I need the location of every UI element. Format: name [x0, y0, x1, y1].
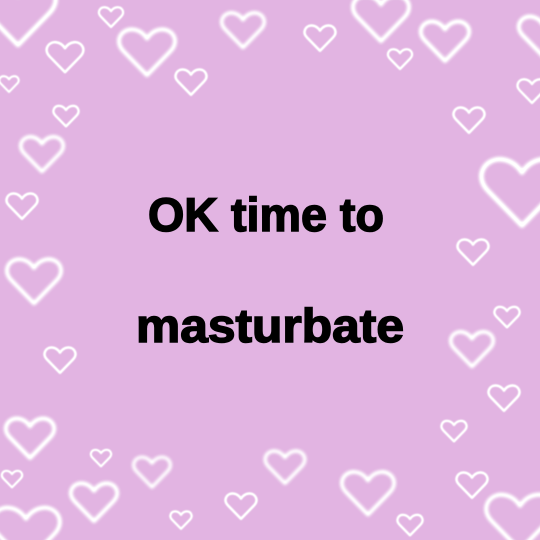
- heading line 1: OK time to: [148, 188, 384, 241]
- heading line 2: masturbate: [136, 299, 404, 352]
